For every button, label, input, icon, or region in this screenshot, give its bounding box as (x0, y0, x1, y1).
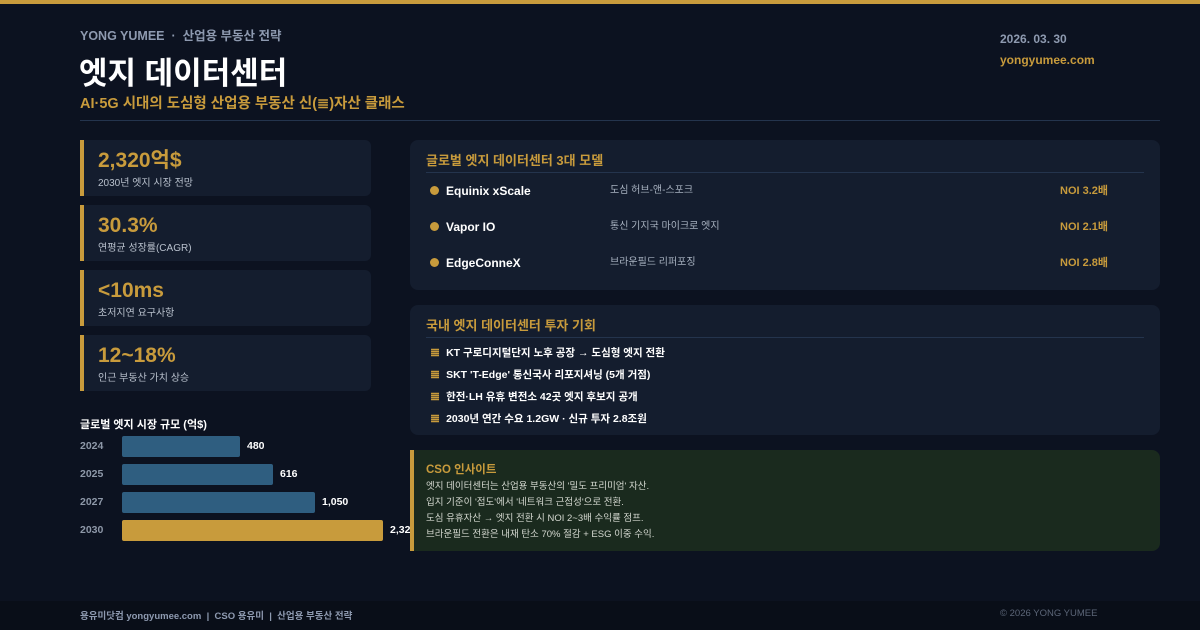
panel: global models: 글로벌 엣지 데이터센터 3대 모델 (426, 153, 603, 168)
callout: CSO insight: CSO 인사이트 (426, 464, 496, 476)
kpi: market: 2,320억$ (98, 149, 182, 172)
subtitle: AI·5G 시대의 도심형 산업용 부동산 신(≣)자산 클래스 (80, 96, 405, 112)
bar chart: 480 (247, 440, 265, 452)
kpi: value (80, 335, 371, 391)
panel: global models (410, 140, 1160, 290)
panel: domestic opportunities: ≣ 한전·LH 유휴 변전소 42곳 엣지 후보지 공개 (430, 389, 638, 403)
bar chart: 2030 (80, 524, 103, 536)
footer (0, 601, 1200, 630)
panel: global models: 도심 허브-앤-스포크 (610, 185, 693, 196)
panel: domestic opportunities: ≣ 2030년 연간 수요 1.2GW · 신규 투자 2.8조원 (430, 411, 647, 425)
panel: domestic opportunities: 국내 엣지 데이터센터 투자 기회 (426, 318, 596, 333)
header kicker: YONG YUMEE · 산업용 부동산 전략 (80, 29, 282, 43)
kpi: latency (80, 270, 371, 326)
panel: global models: 통신 기지국 마이크로 엣지 (610, 221, 720, 232)
kpi: latency: <10ms (98, 279, 164, 302)
kpi: market (80, 140, 371, 196)
panel: domestic opportunities: ≣ SKT 'T-Edge' 통신국사 리포지셔닝 (5개 거점) (430, 367, 650, 381)
footer: 용유미닷컴 yongyumee.com | CSO 용유미 | 산업용 부동산 전략 (80, 611, 352, 622)
kpi: cagr: 30.3% (98, 214, 158, 237)
bar chart: 글로벌 엣지 시장 규모 (억$) (80, 419, 207, 431)
panel: global models: EdgeConneX (446, 256, 521, 270)
callout: CSO insight: 엣지 데이터센터는 산업용 부동산의 '밀도 프리미엄' 자산. (426, 481, 649, 492)
kpi: value: 인근 부동산 가치 상승 (98, 373, 189, 384)
bar chart: 1,050 (322, 496, 348, 508)
panel: global models: NOI 2.8배 (1060, 257, 1108, 269)
kpi: latency: 초저지연 요구사항 (98, 308, 174, 319)
panel: global models: Equinix xScale (446, 184, 531, 198)
kpi: cagr (80, 205, 371, 261)
panel: domestic opportunities (410, 305, 1160, 435)
callout: CSO insight: 브라운필드 전환은 내재 탄소 70% 절감 + ESG 이중 수익. (426, 529, 654, 540)
kpi: market: 2030년 엣지 시장 전망 (98, 178, 193, 189)
date and site (1000, 32, 1095, 67)
panel: global models: NOI 2.1배 (1060, 221, 1108, 233)
callout: CSO insight: 도심 유휴자산 → 엣지 전환 시 NOI 2~3배 수익률 점프. (426, 513, 643, 524)
title: 엣지 데이터센터 (79, 56, 287, 91)
bar chart: 616 (280, 468, 298, 480)
bar chart (80, 418, 410, 541)
bar chart: 2027 (80, 496, 103, 508)
kpi: cagr: 연평균 성장률(CAGR) (98, 243, 192, 254)
callout: CSO insight: 입지 기준이 '접도'에서 '네트워크 근접성'으로 전환. (426, 497, 624, 508)
date and site: yongyumee.com (1000, 53, 1095, 67)
date and site: 2026. 03. 30 (1000, 32, 1067, 46)
panel: domestic opportunities: ≣ KT 구로디지털단지 노후 공장 → 도심형 엣지 전환 (430, 345, 665, 359)
panel: global models: NOI 3.2배 (1060, 185, 1108, 197)
bar chart: 2024 (80, 440, 103, 452)
kpi: value: 12~18% (98, 344, 176, 367)
top gold bar (0, 0, 1200, 4)
footer: © 2026 YONG YUMEE (1000, 608, 1097, 619)
panel: global models: Vapor IO (446, 220, 495, 234)
panel: global models: 브라운필드 리퍼포징 (610, 257, 696, 268)
callout: CSO insight (410, 450, 1160, 551)
bar chart: 2025 (80, 468, 103, 480)
